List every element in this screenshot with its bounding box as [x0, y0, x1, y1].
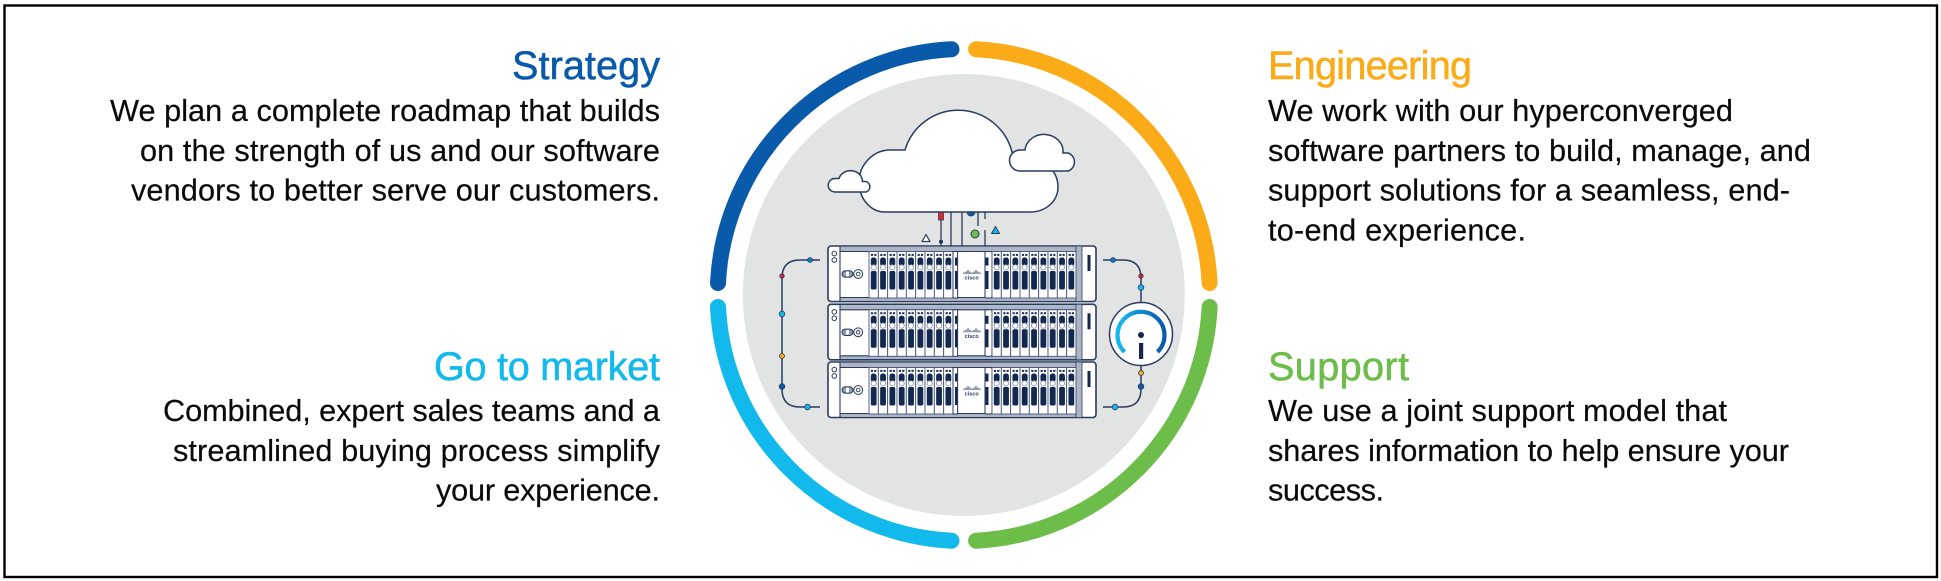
server unit 2	[828, 304, 1096, 360]
arc: support green	[976, 307, 1210, 541]
text block: support description: success.	[1268, 472, 1384, 508]
heading: go to market: Go to market	[434, 345, 660, 389]
text block: go to market description: your experience.	[436, 472, 660, 508]
icon: cloud group	[828, 110, 1074, 212]
text block: go to market description	[163, 393, 661, 508]
panel: strategy	[110, 44, 660, 208]
server unit 1	[828, 246, 1096, 302]
text block: engineering description: support solutions for a seamless, end-	[1268, 172, 1790, 208]
arc: engineering orange	[976, 49, 1210, 283]
server rack	[828, 246, 1096, 418]
icon: left small cloud	[828, 171, 870, 192]
text block: support description: shares information to help ensure your	[1268, 433, 1789, 468]
text block: engineering description: We work with our hyperconverged	[1268, 93, 1733, 128]
heading: engineering: Engineering	[1268, 44, 1472, 88]
panel: engineering	[1268, 44, 1811, 248]
text block: support description: We use a joint support model that	[1268, 393, 1727, 428]
text block: strategy description	[110, 93, 660, 208]
text block: engineering description	[1268, 93, 1811, 248]
ring: four segment circle	[718, 49, 1210, 541]
text block: engineering description: to-end experience.	[1268, 212, 1526, 248]
icon: main cloud	[859, 110, 1058, 212]
server unit 3	[828, 362, 1096, 418]
server unit 1: cisco	[965, 276, 979, 282]
text block: go to market description: Combined, expert sales teams and a	[163, 393, 661, 428]
server unit 3: cisco	[965, 392, 979, 398]
server unit 2: cisco	[965, 334, 979, 340]
right connector	[1103, 258, 1144, 410]
text block: engineering description: software partners to build, manage, and	[1268, 133, 1811, 168]
text block: strategy description: on the strength of us and our software	[140, 133, 660, 168]
background circle	[743, 74, 1185, 516]
heading: support: Support	[1268, 345, 1409, 389]
text block: strategy description: vendors to better serve our customers.	[131, 172, 660, 208]
text block: go to market description: streamlined buying process simplify	[173, 433, 661, 468]
panel: go to market	[163, 345, 661, 508]
arc: strategy blue	[718, 49, 952, 283]
heading: strategy: Strategy	[512, 44, 660, 88]
panel: support	[1268, 345, 1789, 508]
icon: right small cloud	[1010, 134, 1074, 171]
text block: support description	[1268, 393, 1789, 508]
icon: gauge	[1110, 302, 1172, 366]
left connector	[779, 258, 820, 410]
connectors between cloud and servers	[922, 212, 1000, 246]
arc: go to market cyan	[718, 307, 952, 541]
text block: strategy description: We plan a complete roadmap that builds	[110, 93, 660, 128]
